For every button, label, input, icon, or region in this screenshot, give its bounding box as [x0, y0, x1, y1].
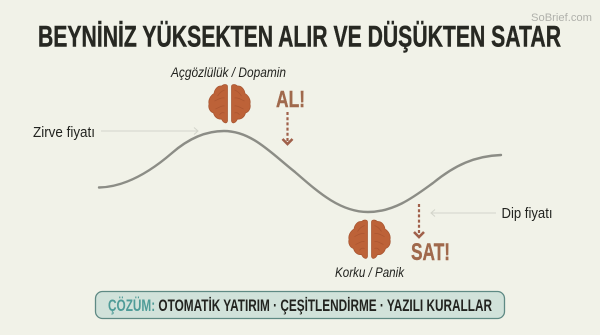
label: sell: SAT! — [411, 239, 450, 266]
arrow: sell down — [414, 204, 424, 237]
arrow: peak price pointer — [101, 128, 198, 134]
arrow: buy down — [282, 112, 292, 144]
label: greed and dopamine: Açgözlülük / Dopamin — [170, 64, 286, 80]
label: dip price: Dip fiyatı — [502, 205, 552, 222]
label: peak price: Zirve fiyatı — [33, 124, 95, 141]
label: buy: AL! — [276, 86, 305, 112]
price curve — [99, 131, 501, 212]
arrow: dip price pointer — [431, 210, 496, 216]
watermark: SoBrief.com — [531, 12, 592, 24]
panel: solution — [96, 292, 504, 318]
icon: panic brain — [349, 220, 390, 258]
icon: greed brain — [209, 85, 250, 123]
label: fear and panic: Korku / Panik — [335, 264, 405, 280]
